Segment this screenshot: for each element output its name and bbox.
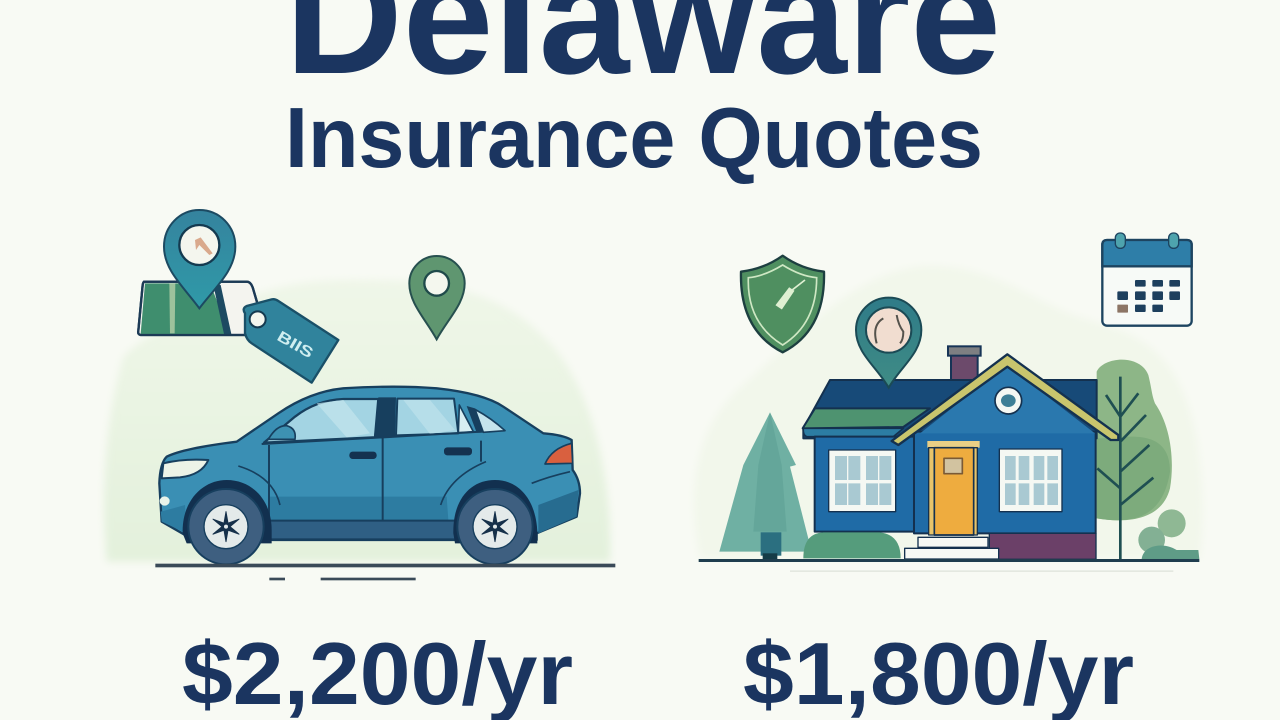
- bushes right: [1138, 509, 1199, 559]
- headlight: [162, 460, 208, 478]
- car body: [159, 387, 580, 540]
- panel: auto insurance illustration: [104, 210, 615, 580]
- icon: home location pin: [856, 298, 921, 388]
- tail light: [545, 443, 573, 464]
- front wheel: [188, 489, 264, 564]
- steps: [918, 537, 988, 547]
- brick base: [989, 533, 1096, 559]
- door: [927, 441, 980, 535]
- road lines: [155, 564, 615, 580]
- icon: map: [138, 282, 267, 335]
- door handles: [349, 452, 377, 459]
- tree: round with bare branches: [1097, 360, 1172, 559]
- subtitle: Insurance Quotes: Insurance Quotes: [285, 91, 983, 186]
- mirror: [268, 426, 295, 439]
- left wing wall: [815, 437, 915, 532]
- ground line: [699, 559, 1199, 562]
- icon: blue location pin: [164, 210, 235, 308]
- gable: [920, 365, 1095, 433]
- icon: calendar: [1102, 233, 1192, 326]
- rocker panel: [263, 521, 460, 539]
- lower body shade: [270, 497, 448, 520]
- icon: green location pin: [409, 256, 465, 339]
- fender lines: [238, 462, 570, 505]
- fog light: [160, 496, 170, 506]
- gable vent: [995, 387, 1022, 414]
- left window: [829, 450, 896, 512]
- shrub: [803, 532, 901, 558]
- rear window: [396, 399, 458, 435]
- rear wheel: [457, 489, 533, 564]
- green eave: [803, 408, 930, 428]
- chimney: [948, 346, 981, 383]
- tree: conifer: [719, 412, 812, 559]
- front window: [264, 399, 378, 443]
- panel: home insurance illustration: [694, 233, 1203, 572]
- back roof: [803, 380, 1097, 438]
- icon: shield: [741, 256, 824, 352]
- right window: [999, 449, 1062, 512]
- door lines: [262, 432, 482, 521]
- house: [803, 354, 1118, 559]
- background hill behind car: [104, 280, 610, 562]
- car: [159, 387, 580, 564]
- wheel arches: [183, 480, 272, 543]
- pillar: [374, 397, 396, 437]
- background hill behind house: [694, 266, 1203, 558]
- icon: price tag: BIIS: [274, 328, 316, 362]
- right wing wall: [914, 432, 1096, 533]
- icon: price tag: [244, 299, 338, 383]
